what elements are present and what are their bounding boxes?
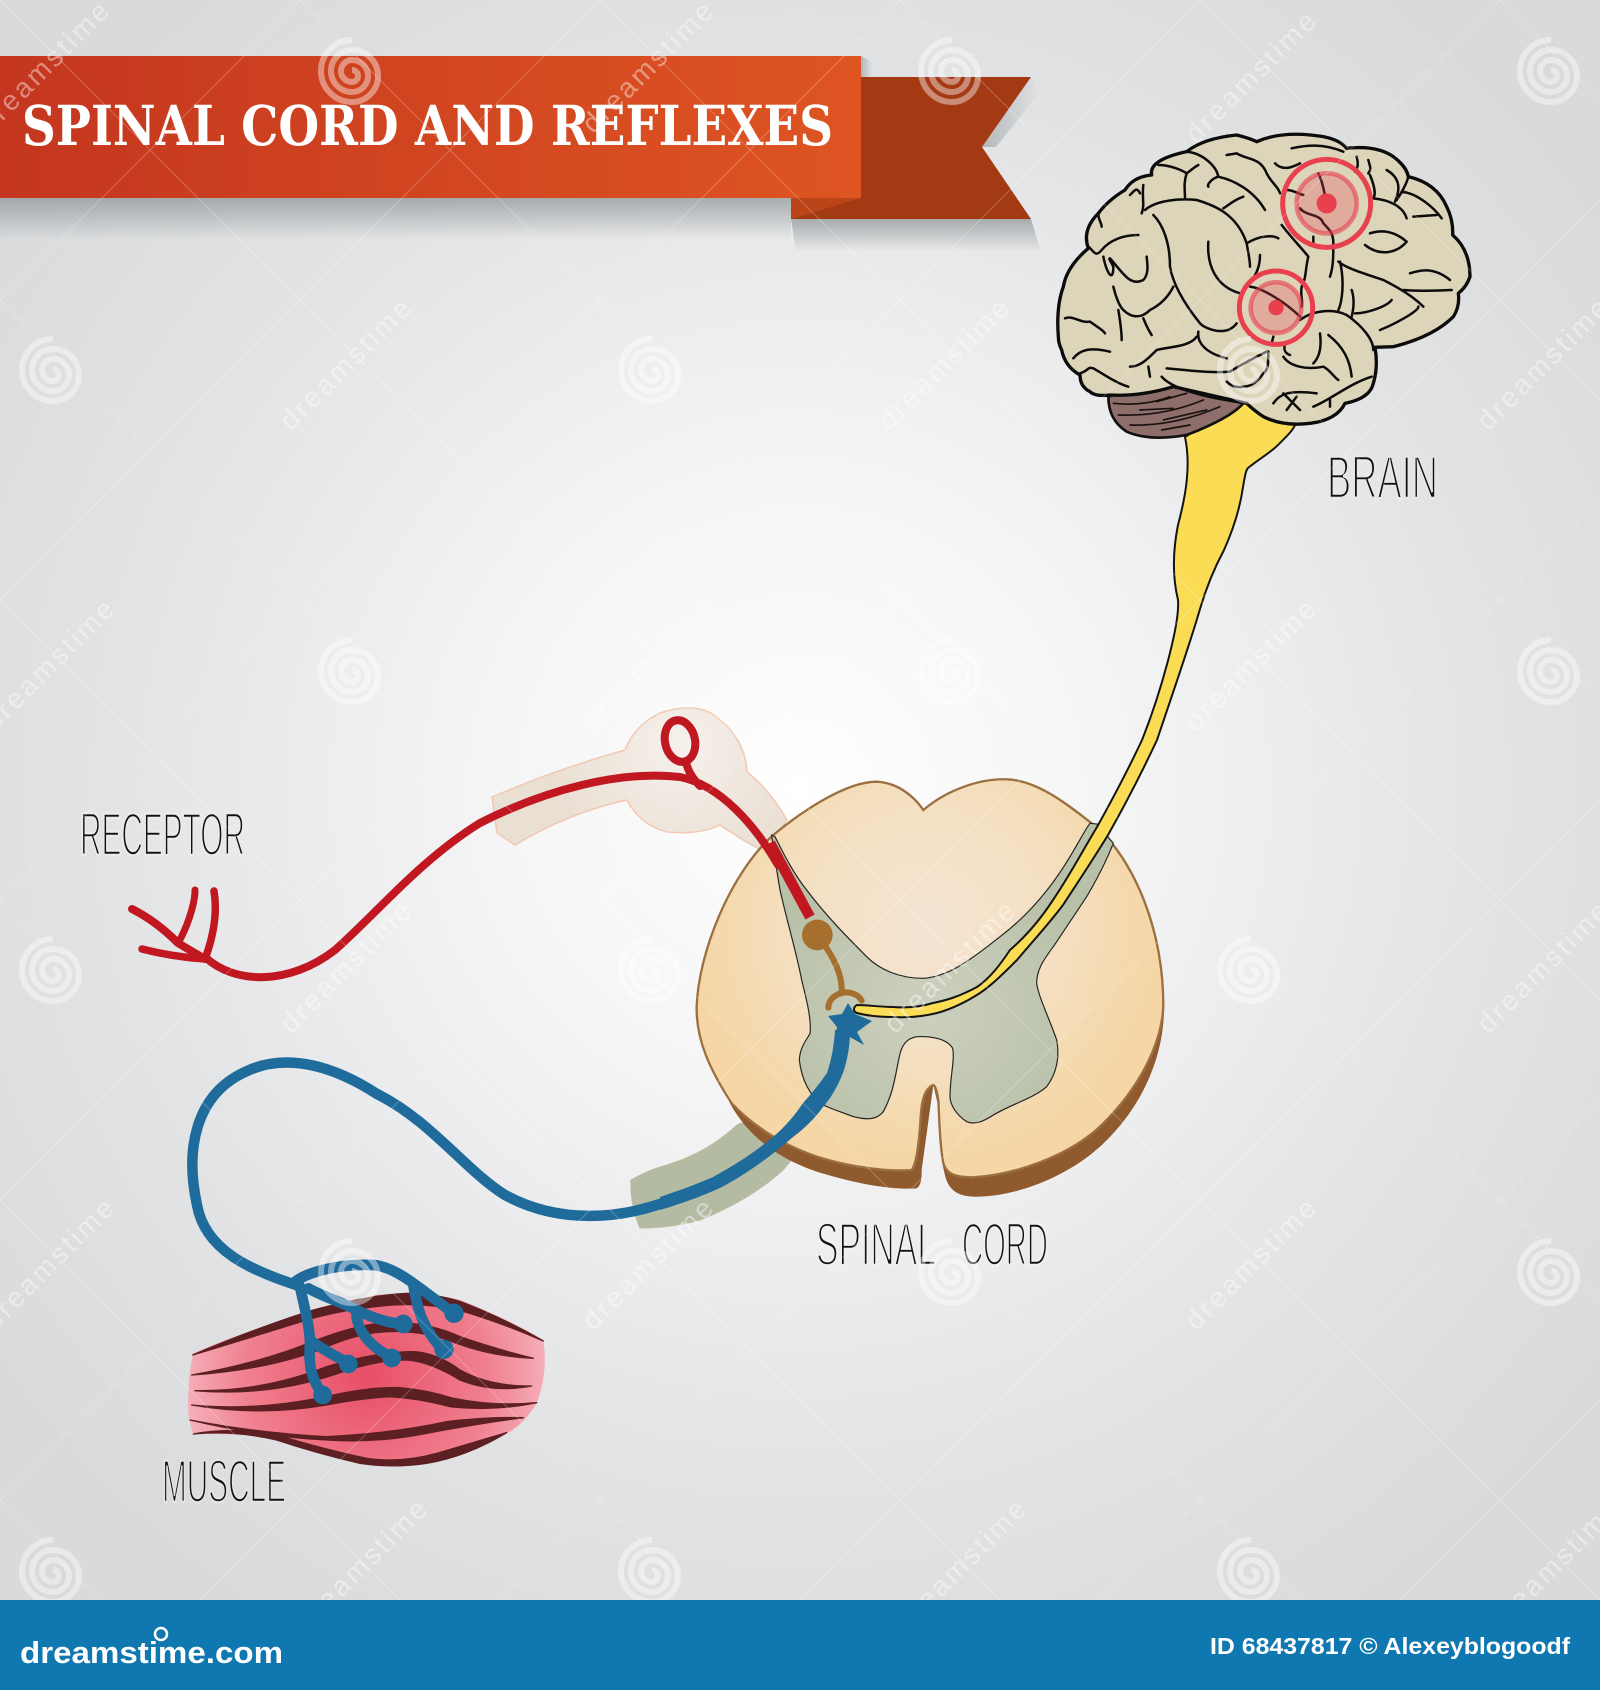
infographic: RECEPTOR	[80, 801, 245, 868]
watermark pattern: dreamstime	[1179, 594, 1322, 737]
sulci	[1065, 146, 1452, 410]
motor end plates	[293, 1265, 464, 1404]
watermark pattern: dreamstime	[872, 293, 1015, 436]
banner tail	[791, 77, 1031, 219]
infographic: CORD	[962, 1211, 1048, 1278]
cord white matter	[697, 779, 1163, 1177]
pain marker upper	[1283, 159, 1371, 247]
watermark pattern: dreamstime	[274, 896, 417, 1039]
watermark pattern: dreamstime	[1179, 1193, 1322, 1336]
footer bar	[0, 1600, 1600, 1690]
label: spinal cord: SPINAL	[816, 1211, 936, 1278]
sensory neuron (receptor fibre)	[132, 717, 810, 977]
spinal cord cross-section	[697, 779, 1164, 1197]
ascending tract to brain	[854, 400, 1295, 1017]
cerebrum outline	[1058, 134, 1470, 424]
motor neuron star	[828, 1003, 872, 1045]
sensory nerve sheath	[492, 708, 787, 852]
cord shadow	[697, 1007, 1164, 1197]
title: SPINAL CORD AND REFLEXES	[22, 93, 833, 158]
watermark pattern: dreamstime	[576, 594, 719, 737]
watermark pattern: dreamstime	[576, 1193, 719, 1336]
footer logo: dreamstime.com	[20, 1635, 283, 1670]
infographic: MUSCLE	[162, 1448, 286, 1515]
muscle fibres	[190, 1293, 543, 1466]
watermark pattern: dreamstime	[274, 293, 417, 436]
muscle	[188, 1293, 545, 1467]
brain	[1058, 134, 1470, 438]
cerebellum	[1108, 387, 1243, 438]
watermark pattern: dreamstime	[290, 1494, 433, 1637]
cord grey matter	[772, 823, 1113, 1123]
interneuron	[802, 920, 862, 1008]
motor nerve sheath	[631, 1110, 800, 1228]
banner ribbon	[0, 56, 861, 198]
motor neuron	[192, 1003, 872, 1404]
watermark pattern: dreamstime	[889, 1494, 1032, 1637]
motor axon thick end	[660, 1030, 850, 1210]
watermark pattern: dreamstime	[878, 896, 1021, 1039]
banner shadow	[0, 56, 1041, 252]
footer credit: ID 68437817 © Alexeyblogoodf	[1210, 1633, 1570, 1659]
muscle body	[188, 1294, 545, 1467]
motor axon	[192, 1063, 663, 1285]
pain marker lower	[1239, 271, 1313, 344]
label: brain: BRAIN	[1327, 444, 1438, 511]
watermark pattern: dreamstime	[1179, 6, 1322, 149]
